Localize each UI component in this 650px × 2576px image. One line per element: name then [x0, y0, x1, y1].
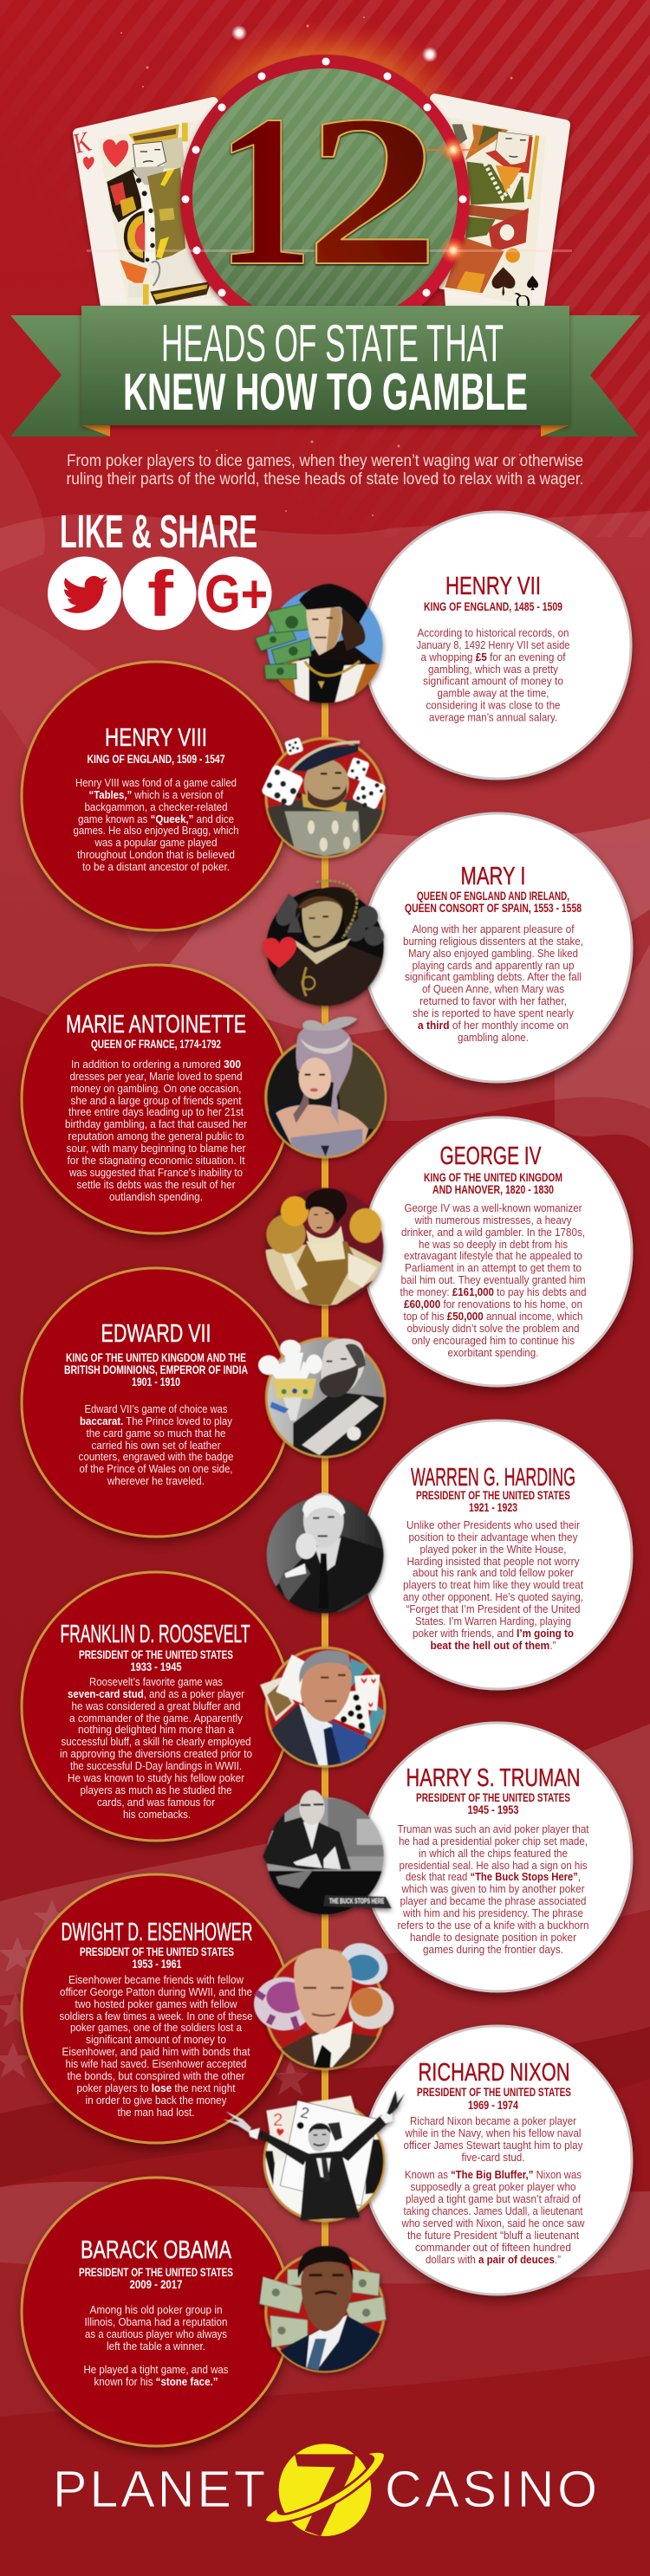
icon: facebook: [123, 556, 196, 631]
story: the card game so much that he: [87, 1427, 226, 1440]
role: 1933 - 1945: [130, 1660, 182, 1673]
story: known for his “stone face.”: [94, 2376, 218, 2388]
story: poker games, one of the soldiers lost a: [70, 2022, 242, 2034]
role: 1953 - 1961: [132, 1957, 182, 1971]
story: played a tight game but wasn’t afraid of: [406, 2193, 581, 2205]
story: Richard Nixon became a poker player: [410, 2115, 576, 2127]
story: nothing delighted him more than a: [78, 1724, 234, 1736]
story: in which all the chips featured the: [419, 1848, 568, 1860]
story: £60,000 for renovations to his home, on: [404, 1298, 582, 1311]
story: settle its debts was the result of her: [76, 1179, 236, 1191]
story: George IV was a well-known womanizer: [404, 1202, 582, 1214]
card: king of hearts: [71, 102, 251, 306]
story: returned to favor with her father,: [419, 995, 567, 1007]
story: Henry VIII was fond of a game called: [75, 777, 237, 789]
icon: twitter: [48, 556, 121, 631]
ribbon banner: [10, 306, 640, 437]
name: MARY I: [461, 863, 525, 890]
name: HARRY S. TRUMAN: [406, 1764, 581, 1792]
story: she is reported to have spent nearly: [413, 1007, 575, 1019]
role: 2009 - 2017: [130, 2277, 183, 2291]
story: three entire days leading up to her 21st: [68, 1106, 244, 1118]
story: with numerous mistresses, a heavy: [414, 1214, 572, 1227]
role: [416, 1488, 570, 1514]
role: AND HANOVER, 1820 - 1830: [432, 1182, 554, 1196]
name: FRANKLIN D. ROOSEVELT: [61, 1621, 250, 1648]
story: who served with Nixon, said he once saw: [401, 2217, 585, 2230]
portrait: Barack Obama: [259, 2246, 387, 2373]
name: GEORGE IV: [440, 1142, 542, 1170]
story: reputation among the general public to: [68, 1130, 244, 1142]
role: 1969 - 1974: [468, 2098, 518, 2112]
story: cards, and was famous for: [97, 1796, 215, 1809]
big heart: [103, 139, 128, 167]
role: QUEEN CONSORT OF SPAIN, 1553 - 1558: [405, 901, 582, 915]
story: Known as “The Big Bluffer,” Nixon was: [405, 2169, 582, 2181]
story: [401, 2115, 585, 2266]
name: BARACK OBAMA: [81, 2236, 231, 2264]
numeral 12: [216, 70, 439, 311]
story: his wife had saved. Eisenhower accepted: [66, 2058, 247, 2070]
story: the future President “bluff a lieutenant: [407, 2230, 579, 2242]
story: a whopping £5 for an evening of: [421, 651, 566, 663]
story: [400, 1202, 587, 1359]
story: Parliament in an attempt to get them to: [405, 1262, 582, 1274]
logo mark: yellow planet with seven: [264, 2443, 385, 2536]
story: was a popular game played: [94, 837, 218, 849]
role: 1945 - 1953: [468, 1803, 519, 1816]
intro text: [66, 452, 584, 489]
icon: facebook: f: [147, 558, 173, 630]
portrait: Franklin D. Roosevelt: [260, 1647, 385, 1767]
story: sour, with many beginning to blame her: [66, 1142, 246, 1155]
name: MARIE ANTOINETTE: [66, 1011, 246, 1039]
numeral 12: 1: [216, 71, 313, 311]
story: Among his old poker group in: [90, 2304, 223, 2316]
story: [78, 1403, 234, 1487]
story: [65, 1058, 247, 1203]
story: in order to give back the money: [85, 2094, 227, 2107]
name: HENRY VIII: [105, 724, 207, 752]
role: 1901 - 1910: [132, 1375, 180, 1388]
story: games. He also enjoyed Bragg, which: [73, 825, 239, 837]
story: he was so deeply in debt from his: [419, 1239, 568, 1251]
story: players as much as he studied the: [80, 1784, 232, 1796]
story: [403, 923, 583, 1044]
story: He was known to study his fellow poker: [68, 1772, 244, 1784]
story: exorbitant spending.: [447, 1347, 539, 1359]
story: gambling, which was a pretty: [428, 663, 559, 676]
story: [397, 1823, 589, 1956]
role: PRESIDENT OF THE UNITED STATES: [416, 1488, 570, 1502]
story: two hosted poker games with fellow: [75, 1998, 237, 2010]
story: left the table a winner.: [107, 2340, 205, 2353]
story: “Forget that I’m President of the United: [406, 1603, 581, 1615]
story: as a cautious player who always: [85, 2328, 227, 2340]
story: [416, 627, 570, 724]
role: QUEEN OF FRANCE, 1774-1792: [91, 1037, 221, 1051]
story: supposedly a great poker player who: [411, 2181, 576, 2193]
role: [64, 1350, 248, 1388]
story: five-card stud.: [461, 2152, 525, 2164]
portrait: Dwight D. Eisenhower: [254, 1935, 395, 2073]
story: States. I’m Warren Harding, playing: [415, 1615, 571, 1628]
story: [403, 1519, 583, 1652]
role: BRITISH DOMINIONS, EMPEROR OF INDIA: [64, 1362, 248, 1376]
role: PRESIDENT OF THE UNITED STATES: [416, 1790, 570, 1804]
panel: Franklin D. Roosevelt: [22, 1572, 290, 1841]
story: Edward VII’s game of choice was: [85, 1403, 227, 1415]
role: [79, 2265, 233, 2291]
story: seven-card stud, and as a poker player: [68, 1688, 244, 1700]
story: his comebacks.: [123, 1809, 191, 1821]
story: throughout London that is believed: [77, 849, 235, 861]
panel: Barack Obama: [22, 2178, 290, 2446]
panel: Dwight D. Eisenhower: [22, 1874, 290, 2143]
role: [80, 1945, 234, 1971]
story: drinker, and a wild gambler. In the 1780s,: [401, 1227, 585, 1239]
role: PRESIDENT OF THE UNITED STATES: [79, 1647, 233, 1661]
story: outlandish spending.: [109, 1191, 203, 1203]
story: significant amount of money to: [423, 676, 563, 688]
role: [424, 1170, 562, 1196]
intro text: From poker players to dice games, when they weren’t waging war or otherwise: [67, 452, 583, 470]
sparkles: [120, 16, 521, 516]
story: was suggested that France’s inability to: [68, 1167, 243, 1179]
panel: Edward VII: [22, 1268, 290, 1537]
like and share heading: LIKE & SHARE: [60, 506, 257, 558]
card index: Q: Q: [514, 289, 532, 314]
story: of the Prince of Wales on one side,: [80, 1463, 232, 1475]
story: “Tables,” which is a version of: [88, 789, 224, 801]
story: birthday gambling, a fact that caused her: [65, 1118, 247, 1130]
role: KING OF ENGLAND, 1509 - 1547: [87, 752, 225, 766]
story: considering it was close to the: [426, 700, 561, 712]
story: [73, 777, 239, 873]
story: the money: £161,000 to pay his debts and: [400, 1286, 587, 1298]
role: [79, 1647, 233, 1673]
icon: google plus: [198, 556, 272, 631]
role: [416, 1790, 570, 1816]
story: January 8, 1492 Henry VII set aside: [416, 639, 570, 651]
story: of Queen Anne, when Mary was: [422, 983, 564, 995]
role: 1921 - 1923: [469, 1500, 517, 1514]
story: average man’s annual salary.: [429, 712, 557, 724]
story: Eisenhower, and paid him with bonds that: [62, 2046, 250, 2058]
story: in approving the diversions created prior to: [60, 1748, 252, 1760]
role: PRESIDENT OF THE UNITED STATES: [80, 1945, 234, 1958]
story: Illinois, Obama had a reputation: [85, 2316, 228, 2328]
panel: George IV: [363, 1117, 632, 1386]
story: gambling alone.: [458, 1032, 529, 1044]
story: Truman was such an avid poker player that: [397, 1823, 589, 1835]
story: position to their advantage when they: [409, 1531, 578, 1544]
story: the bonds, but conspired with the other: [68, 2070, 244, 2082]
role: PRESIDENT OF THE UNITED STATES: [417, 2085, 571, 2099]
story: taking chances. James Udall, a lieutenant: [404, 2205, 583, 2217]
story: Roosevelt’s favorite game was: [89, 1676, 223, 1688]
story: played poker in the White House,: [419, 1544, 567, 1556]
portrait: Harry S. Truman: [263, 1790, 392, 1920]
role: KING OF THE UNITED KINGDOM AND THE: [66, 1350, 246, 1364]
portrait: Henry VIII: [261, 737, 387, 860]
story: any other opponent. He’s quoted saying,: [403, 1591, 583, 1603]
role: KING OF ENGLAND, 1485 - 1509: [424, 599, 562, 613]
role: [405, 889, 582, 915]
story: players to treat him like they would treat: [403, 1579, 583, 1591]
story: money on gambling. On one occasion,: [71, 1083, 241, 1095]
story: a third of her monthly income on: [418, 1019, 569, 1032]
story: commander out of fifteen hundred: [415, 2242, 571, 2254]
story: Unlike other Presidents who used their: [406, 1519, 580, 1531]
portrait: Warren G. Harding: [267, 1492, 386, 1617]
numeral 12: 2: [305, 70, 439, 310]
story: dollars with a pair of deuces.”: [426, 2254, 561, 2266]
name: EDWARD VII: [101, 1320, 211, 1348]
name: HENRY VII: [445, 573, 541, 600]
emblem: numbered wheel: [87, 55, 572, 342]
story: [59, 1974, 253, 2119]
role: KING OF THE UNITED KINGDOM: [424, 1170, 562, 1184]
card art: queen: [439, 117, 546, 306]
story: Harding insisted that people not worry: [407, 1556, 580, 1568]
story: significant gambling debts. After the fall: [405, 971, 582, 983]
story: gamble away at the time,: [437, 688, 549, 700]
story: poker players to lose the next night: [76, 2082, 236, 2094]
story: beat the hell out of them.”: [430, 1640, 556, 1652]
story: a commander of the game. Apparently: [69, 1712, 244, 1725]
panel: Warren G. Harding: [363, 1421, 632, 1689]
card: queen of spades: [435, 99, 565, 314]
story: presidential seal. He also had a sign on his: [399, 1860, 588, 1872]
connector line: [322, 693, 328, 2261]
social icons: [48, 556, 272, 631]
story: officer James Stewart taught him to play: [404, 2139, 583, 2152]
glow behind emblem: [178, 17, 472, 199]
panel: Henry VII: [364, 512, 631, 779]
story: [83, 2304, 229, 2388]
panel: Marie Antoinette: [22, 965, 290, 1233]
story: about his rank and told fellow poker: [413, 1567, 574, 1579]
story: [60, 1676, 252, 1821]
logo word: planet: PLANET: [53, 2461, 265, 2518]
panel: Harry S. Truman: [363, 1723, 632, 1991]
story: with him and his presidency. The phrase: [402, 1907, 583, 1919]
story: he was considered a great bluffer and: [71, 1700, 241, 1712]
story: while in the Navy, when his fellow naval: [405, 2127, 581, 2139]
portrait: Mary I: [263, 881, 384, 1007]
name: RICHARD NIXON: [418, 2059, 570, 2087]
story: desk that read “The Buck Stops Here”,: [406, 1871, 581, 1883]
panel: Richard Nixon: [363, 2026, 632, 2294]
story: only encouraged him to continue his: [412, 1335, 575, 1347]
story: handle to designate position in poker: [410, 1932, 576, 1944]
story: Eisenhower became friends with fellow: [68, 1974, 244, 1986]
story: Along with her apparent pleasure of: [413, 923, 575, 935]
story: successful bluff, a skill he clearly employed: [61, 1736, 251, 1748]
name: DWIGHT D. EISENHOWER: [61, 1919, 253, 1946]
story: games during the frontier days.: [423, 1944, 563, 1956]
story: counters, engraved with the badge: [78, 1451, 234, 1463]
story: he had a presidential poker chip set made,: [399, 1835, 588, 1848]
story: Mary also enjoyed gambling. She liked: [408, 948, 578, 960]
small heart: [83, 157, 94, 170]
story: to be a distant ancestor of poker.: [82, 861, 230, 873]
card index: 2 of hearts: 2: [299, 2103, 311, 2122]
desk sign text: THE BUCK STOPS HERE: [329, 1898, 385, 1906]
story: for the stagnating economic situation. It: [68, 1155, 245, 1167]
card index: 2 of hearts: 2: [273, 2111, 283, 2130]
role: QUEEN OF ENGLAND AND IRELAND,: [417, 889, 569, 903]
story: player and became the phrase associated: [400, 1895, 587, 1907]
story: In addition to ordering a rumored 300: [71, 1058, 241, 1071]
role: [417, 2085, 571, 2112]
story: extravagant lifestyle that he appealed to: [404, 1250, 582, 1262]
story: baccarat. The Prince loved to play: [80, 1415, 233, 1427]
story: which was given to him by another poker: [401, 1883, 584, 1895]
intro text: ruling their parts of the world, these heads of state loved to relax with a wager.: [66, 470, 584, 489]
logo: Planet 7 Casino: [53, 2443, 597, 2536]
story: officer George Patton during WWII, and the: [60, 1986, 252, 1998]
story: bail him out. They eventually granted him: [400, 1274, 586, 1286]
story: dresses per year, Marie loved to spend: [69, 1071, 243, 1083]
role: PRESIDENT OF THE UNITED STATES: [79, 2265, 233, 2279]
portrait: Marie Antoinette: [266, 1017, 386, 1158]
panel: Henry VIII: [22, 662, 290, 930]
story: He played a tight game, and was: [83, 2364, 229, 2376]
story: she and a large group of friends spent: [71, 1095, 242, 1107]
icon: google plus: G+: [205, 565, 268, 625]
story: playing cards and apparently ran up: [413, 960, 575, 972]
story: the successful D-Day landings in WWII.: [70, 1760, 242, 1772]
card index: 2 of hearts: [273, 2103, 311, 2136]
portrait: Henry VII: [255, 584, 386, 710]
story: According to historical records, on: [418, 627, 569, 639]
story: game known as “Queek,” and dice: [78, 813, 234, 825]
portrait: George IV: [264, 1188, 384, 1306]
story: top of his £50,000 annual income, which: [404, 1311, 583, 1323]
panel: Mary I: [363, 813, 632, 1082]
story: backgammon, a checker-related: [85, 801, 228, 813]
story: refers to the use of a knife with a buckhorn: [397, 1919, 589, 1932]
portrait: Richard Nixon: [223, 2090, 405, 2221]
story: burning religious dissenters at the stake,: [403, 935, 583, 948]
story: significant amount of money to: [86, 2034, 226, 2046]
story: carried his own set of leather: [92, 1440, 220, 1452]
story: wherever he traveled.: [107, 1475, 205, 1487]
story: soldiers a few times a week. In one of these: [59, 2010, 253, 2023]
story: poker with friends, and I’m going to: [413, 1628, 574, 1640]
story: the man had lost.: [118, 2107, 194, 2119]
logo word: casino: CASINO: [385, 2461, 597, 2518]
card art: king: [98, 120, 217, 306]
portrait: Edward VII: [258, 1338, 386, 1458]
card index: K: K: [71, 126, 94, 160]
story: obviously didn’t solve the problem and: [407, 1323, 580, 1335]
